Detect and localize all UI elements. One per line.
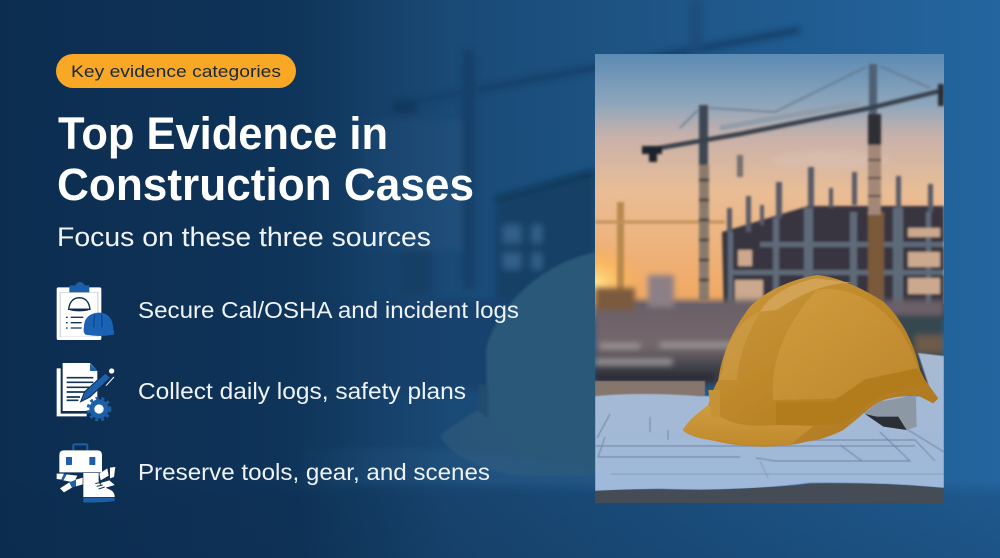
blueprint xyxy=(595,353,944,491)
icon: toolbox, caution tape and boot xyxy=(57,444,115,502)
photo: hard hat on blueprints at a construction site xyxy=(595,54,944,503)
building xyxy=(722,167,944,322)
title xyxy=(57,108,474,210)
background crane small xyxy=(595,202,725,292)
blurred ground xyxy=(595,275,944,385)
icon: document with pen and gear xyxy=(57,363,114,420)
list item: Cal/OSHA logs xyxy=(57,282,519,340)
title: Top Evidence in xyxy=(58,108,388,159)
subtitle: Focus on these three sources xyxy=(57,222,431,252)
badge: key evidence categories xyxy=(56,54,296,88)
tower cranes xyxy=(642,64,944,300)
sky xyxy=(595,54,944,304)
list item: daily logs: Collect daily logs, safety plans xyxy=(138,378,466,404)
icon: clipboard with hard hats xyxy=(57,282,114,340)
list item: tools and gear xyxy=(57,444,490,502)
list item: daily logs xyxy=(57,363,466,420)
title: Construction Cases xyxy=(57,159,474,210)
hard hat xyxy=(683,275,938,447)
list item: tools and gear: Preserve tools, gear, and scenes xyxy=(138,459,490,485)
list item: Cal/OSHA logs: Secure Cal/OSHA and incident logs xyxy=(138,297,519,323)
badge: key evidence categories: Key evidence categories xyxy=(71,63,281,81)
table xyxy=(595,381,705,396)
